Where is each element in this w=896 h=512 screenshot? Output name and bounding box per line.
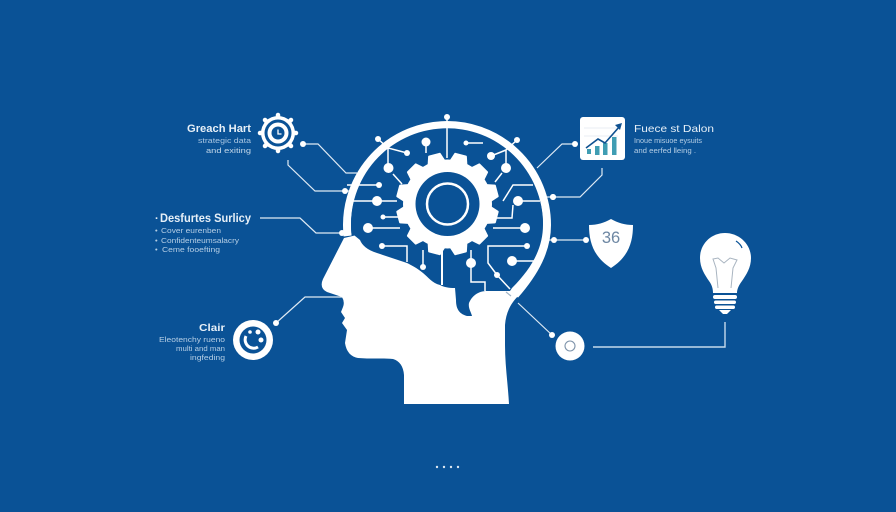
text block: growth: and exiting xyxy=(206,146,251,155)
circuit nodes xyxy=(363,114,556,278)
brain cavity xyxy=(351,128,543,316)
text block: clair: ingfeding xyxy=(190,355,225,362)
central gear xyxy=(397,153,498,255)
icon: shield with number: 36 xyxy=(602,229,620,247)
text block: features list: • xyxy=(155,245,158,254)
text block: features list: Cover eurenben xyxy=(161,226,221,235)
pagination dots xyxy=(436,466,459,468)
head profile xyxy=(322,225,548,404)
text block: forecast: and eerfed lleing . xyxy=(634,148,696,155)
text block: growth xyxy=(187,123,251,155)
text block: features list: Desfurtes Surlicy xyxy=(160,213,252,225)
text block: forecast: Fuece st Dalon xyxy=(634,123,714,135)
neck tick xyxy=(506,292,511,296)
icon: shield with number xyxy=(589,219,633,268)
text block: forecast xyxy=(634,123,714,155)
text block: clair: Eleotenchy rueno xyxy=(159,337,225,344)
text block: growth: Greach Hart xyxy=(187,123,251,135)
text block: features list: Confidenteumsalacry xyxy=(161,236,239,245)
head silhouette with brain circuit xyxy=(322,114,556,404)
text block: features list xyxy=(155,213,252,254)
text block: clair: Clair xyxy=(199,323,225,334)
icon: chat circle xyxy=(233,320,273,360)
text block: features list: Ceme fooefting xyxy=(162,245,220,254)
icon: top left gear xyxy=(260,115,296,151)
connector lines xyxy=(260,141,725,347)
text block: growth: strategic data xyxy=(198,138,251,145)
skull ring xyxy=(347,125,547,295)
text block: features list: · xyxy=(155,213,159,225)
text block: clair: multi and man xyxy=(176,346,225,353)
circuit traces xyxy=(347,117,540,291)
icon: growth chart card xyxy=(580,117,625,160)
text block: clair xyxy=(159,323,225,362)
text block: forecast: Inoue misuoe eysuits xyxy=(634,138,703,145)
text block: features list: • xyxy=(155,226,158,235)
icon: light bulb xyxy=(700,233,751,314)
text block: features list: • xyxy=(155,236,158,245)
icon: small circle node xyxy=(556,332,584,360)
